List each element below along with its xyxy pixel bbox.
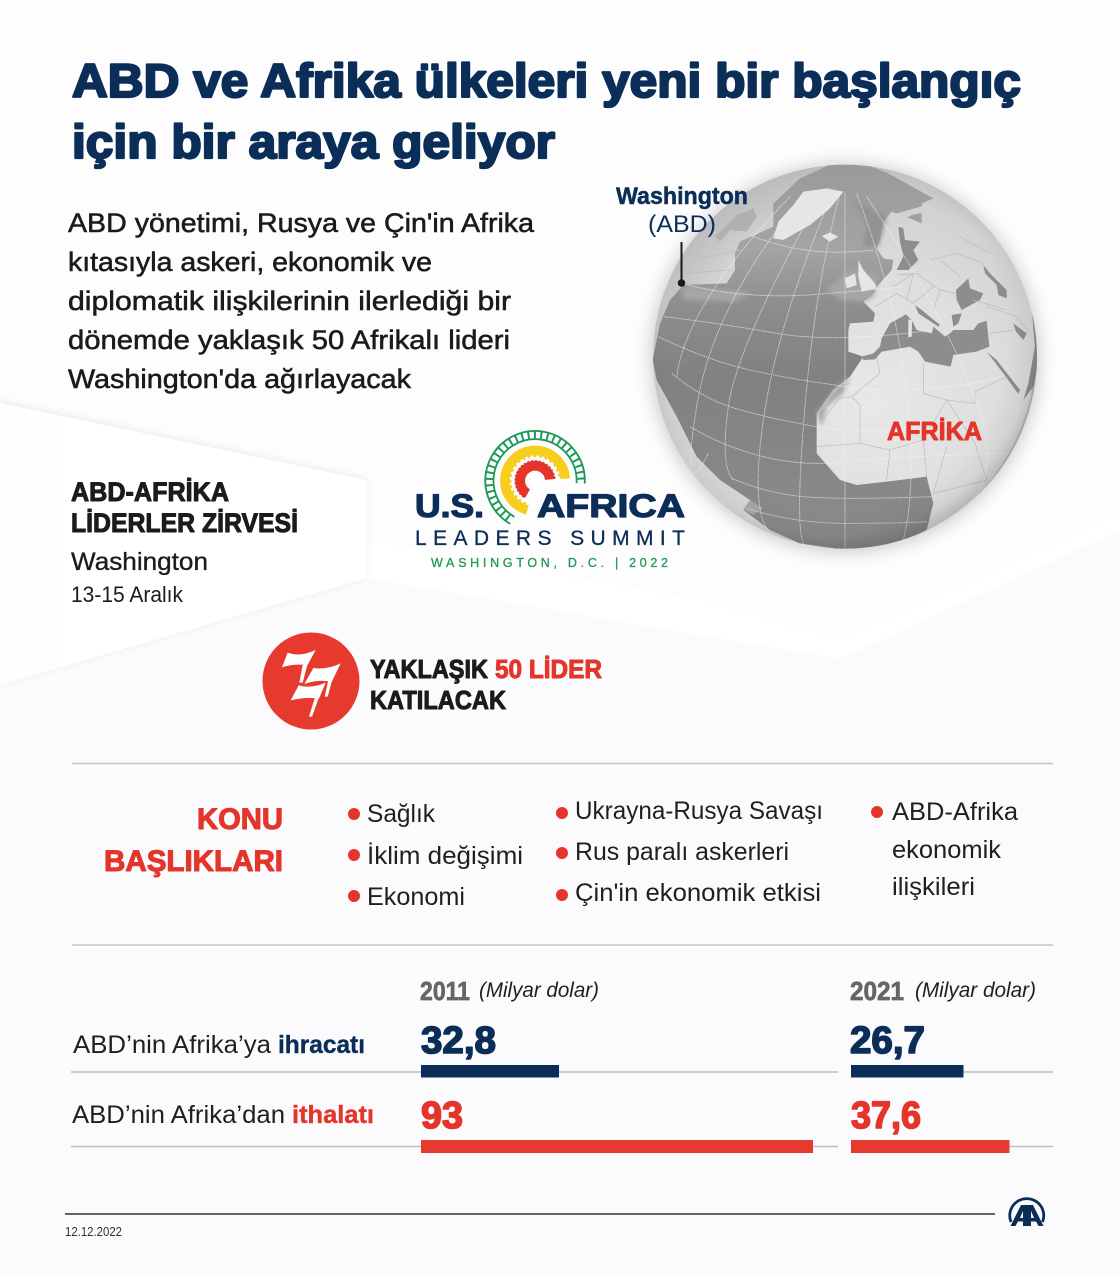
title: için bir araya geliyor bbox=[72, 116, 555, 169]
column header 2011: (Milyar dolar) bbox=[479, 979, 599, 1002]
topics heading bbox=[104, 803, 283, 878]
ocean shelves bbox=[683, 200, 887, 427]
bar: imports 2011 bbox=[421, 1095, 813, 1153]
title bbox=[72, 55, 1021, 169]
intro text block bbox=[68, 208, 535, 394]
intro text block: ABD yönetimi, Rusya ve Çin'in Afrika bbox=[68, 208, 535, 238]
logo wordmark: LEADERS SUMMIT bbox=[415, 527, 685, 550]
topics list 2: Rus paralı askerleri bbox=[575, 838, 789, 866]
topics list 3: ekonomik bbox=[892, 836, 1002, 864]
topics list 1: Sağlık bbox=[367, 800, 435, 828]
bar: exports 2011 bbox=[421, 1020, 559, 1078]
ocean bbox=[653, 165, 933, 550]
logo arcs bbox=[489, 435, 581, 520]
logo wordmark: AFRICA bbox=[537, 488, 685, 524]
row label: exports: ihracatı bbox=[278, 1031, 365, 1059]
panel heading bbox=[71, 477, 298, 538]
bar: imports 2021 bbox=[851, 1095, 1010, 1153]
topics list 1: İklim değişimi bbox=[367, 841, 523, 870]
graticule bbox=[658, 193, 1003, 548]
summit logo: WASHINGTON, D.C. | 2022 bbox=[431, 556, 668, 570]
bar: imports 2011: 93 bbox=[421, 1095, 463, 1137]
seas bbox=[862, 227, 1038, 400]
panel: summit info bbox=[0, 400, 367, 685]
intro text block: dönemde yaklaşık 50 Afrikalı lideri bbox=[68, 325, 510, 355]
bar: exports 2021: 26,7 bbox=[850, 1020, 925, 1062]
intro text block: Washington'da ağırlayacak bbox=[68, 364, 412, 394]
topics list 2 bbox=[556, 797, 823, 907]
column header 2021 bbox=[850, 976, 1036, 1006]
row label: imports: ithalatı bbox=[292, 1101, 374, 1129]
callout: participants bbox=[370, 654, 602, 715]
place and date: Washington bbox=[71, 548, 208, 576]
topics list 3: ilişkileri bbox=[892, 873, 975, 901]
row label: exports bbox=[73, 1031, 365, 1059]
intro text block: kıtasıyla askeri, ekonomik ve bbox=[68, 247, 432, 277]
bar chart: trade bbox=[71, 976, 1053, 1153]
label: Afrika: AFRİKA bbox=[887, 416, 982, 446]
summit logo bbox=[415, 435, 685, 570]
callout: participants: YAKLAŞIK bbox=[370, 654, 488, 684]
label: Washington: (ABD) bbox=[648, 211, 716, 238]
label: Washington: Washington bbox=[616, 183, 748, 210]
panel heading: LİDERLER ZİRVESİ bbox=[71, 508, 298, 538]
label: Washington bbox=[616, 183, 748, 287]
column header 2021: 2021 bbox=[850, 976, 904, 1006]
row label: exports: ABD’nin Afrika’ya bbox=[73, 1031, 271, 1059]
icon: AA logo bbox=[1010, 1199, 1044, 1226]
icon: flags in red circle bbox=[262, 632, 360, 730]
topics list 2: Ukrayna-Rusya Savaşı bbox=[575, 797, 823, 825]
land: Greenland, Iceland, Britain, islands bbox=[773, 188, 937, 337]
intro text block: diplomatik ilişkilerinin ilerlediği bir bbox=[68, 286, 511, 316]
logo wordmark bbox=[415, 488, 685, 550]
date: 12.12.2022 bbox=[65, 1224, 122, 1239]
topics list 3 bbox=[871, 798, 1018, 901]
bar: imports 2021: 37,6 bbox=[851, 1095, 921, 1137]
row label: imports bbox=[72, 1101, 374, 1129]
borders bbox=[683, 237, 1030, 493]
callout: participants: 50 LİDER bbox=[495, 654, 602, 684]
topics heading: BAŞLIKLARI bbox=[104, 845, 283, 878]
panel heading: ABD-AFRİKA bbox=[71, 477, 229, 507]
column header 2021: (Milyar dolar) bbox=[915, 979, 1036, 1002]
place and date bbox=[71, 548, 208, 607]
bar: exports 2011: 32,8 bbox=[421, 1020, 496, 1062]
topics list 1 bbox=[348, 800, 523, 911]
topics heading: KONU bbox=[197, 803, 283, 836]
callout: participants: KATILACAK bbox=[370, 685, 506, 715]
globe map bbox=[616, 164, 1039, 552]
place and date: 13-15 Aralık bbox=[71, 582, 184, 607]
panel: topics bbox=[104, 797, 1018, 911]
column header 2011 bbox=[420, 976, 599, 1006]
topics list 3: ABD-Afrika bbox=[892, 798, 1018, 826]
logo wordmark: U.S. bbox=[415, 488, 484, 524]
row label: imports: ABD’nin Afrika’dan bbox=[72, 1101, 285, 1129]
column header 2011: 2011 bbox=[420, 976, 470, 1006]
topics list 2: Çin'in ekonomik etkisi bbox=[575, 879, 821, 907]
bar: exports 2021 bbox=[850, 1020, 964, 1078]
topics list 1: Ekonomi bbox=[367, 883, 465, 911]
title: ABD ve Afrika ülkeleri yeni bir başlangıç bbox=[72, 55, 1021, 108]
